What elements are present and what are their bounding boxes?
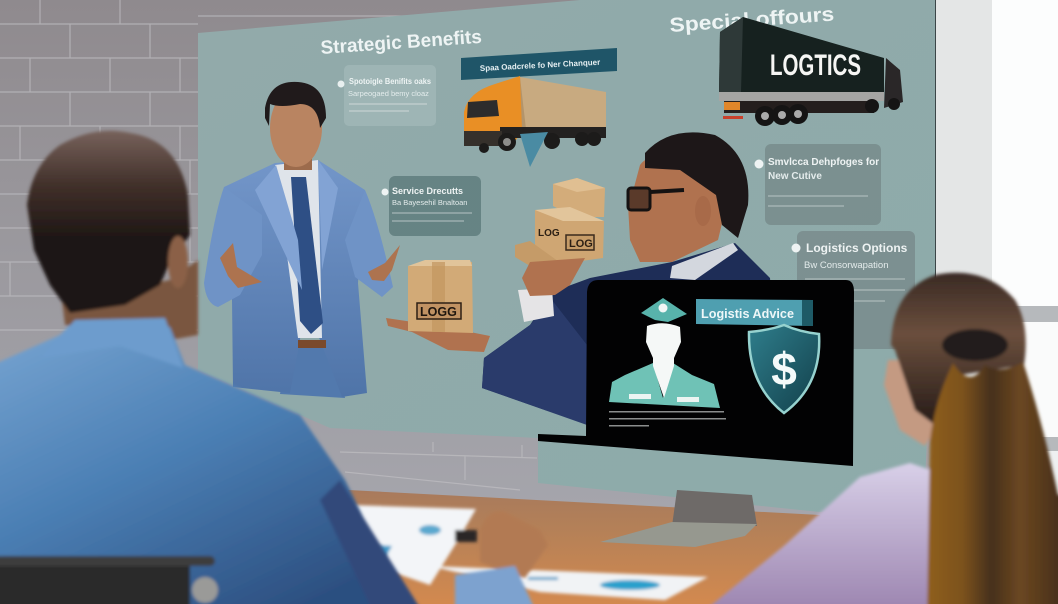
icon: LOGG parcel <box>408 260 473 333</box>
banner: Logistics Advice: Logistis Advice <box>701 306 794 321</box>
monitor screen <box>538 280 854 466</box>
monitor foot <box>600 522 757 547</box>
callout: service discounts card <box>382 176 481 236</box>
callout: logistics options card <box>792 231 915 349</box>
icon: black logistics trailer <box>719 17 903 126</box>
callout: strategic benefits card <box>338 65 436 126</box>
tie <box>291 177 323 334</box>
callout: service card right <box>754 144 881 225</box>
figure: seated man from behind <box>0 131 548 604</box>
panel: projected slide <box>198 0 935 512</box>
left sleeve <box>204 187 262 307</box>
lapels <box>255 165 302 290</box>
callout: logistics options card: Bw Consorwapation <box>804 260 888 271</box>
callout: strategic benefits card: Sarpeogaed bemy cloaz <box>348 89 429 98</box>
icon: stacked cartons: LOG <box>538 228 560 239</box>
background: brick wall <box>0 0 940 530</box>
icon: uniformed officer <box>609 298 720 408</box>
jacket body <box>224 160 367 397</box>
icon: stacked cartons: LOG <box>569 238 593 250</box>
monitor <box>538 280 854 547</box>
icon: black logistics trailer: LOGTICS <box>770 49 861 82</box>
shirt <box>275 160 322 338</box>
papers on table <box>350 505 708 600</box>
icon: dollar shield <box>749 325 819 413</box>
icon: orange truck <box>464 76 606 153</box>
icon: teal pointer <box>520 132 548 167</box>
monitor caption lines <box>609 411 726 426</box>
icon: LOGG parcel: LOGG <box>420 305 457 319</box>
right sleeve <box>345 190 393 297</box>
heading: Strategic Benefits: Strategic Benefits <box>320 27 483 59</box>
figure: standing presenter <box>204 82 400 398</box>
figure: seated woman from behind <box>698 273 1058 604</box>
banner: truck caption <box>461 48 617 80</box>
callout: strategic benefits card: Spotoigle Benifits oaks <box>349 77 431 86</box>
icon: stacked cartons <box>515 178 605 266</box>
monitor stand <box>672 490 757 526</box>
callout: logistics options card: Logistics Options <box>806 241 908 255</box>
background: window and frame <box>934 0 1058 604</box>
icon: dollar shield: $ <box>771 343 797 395</box>
callout: service discounts card: Ba Bayesehil Bnaltoan <box>392 198 467 207</box>
callout: service card right: Smvlcca Dehpfoges for <box>768 157 879 168</box>
banner: truck caption: Spaa Oadcrele fo Ner Chanquer <box>480 58 600 73</box>
callout: service card right: New Cutive <box>768 171 822 182</box>
right hand <box>368 245 400 281</box>
heading: Special offours: Special offours <box>669 4 835 37</box>
banner: Logistics Advice <box>696 299 813 326</box>
belt <box>298 340 326 348</box>
trousers <box>280 340 345 398</box>
figure: second presenter with glasses <box>386 132 775 425</box>
left hand <box>220 243 262 288</box>
table <box>330 490 880 604</box>
callout: service discounts card: Service Drecutts <box>392 186 463 196</box>
